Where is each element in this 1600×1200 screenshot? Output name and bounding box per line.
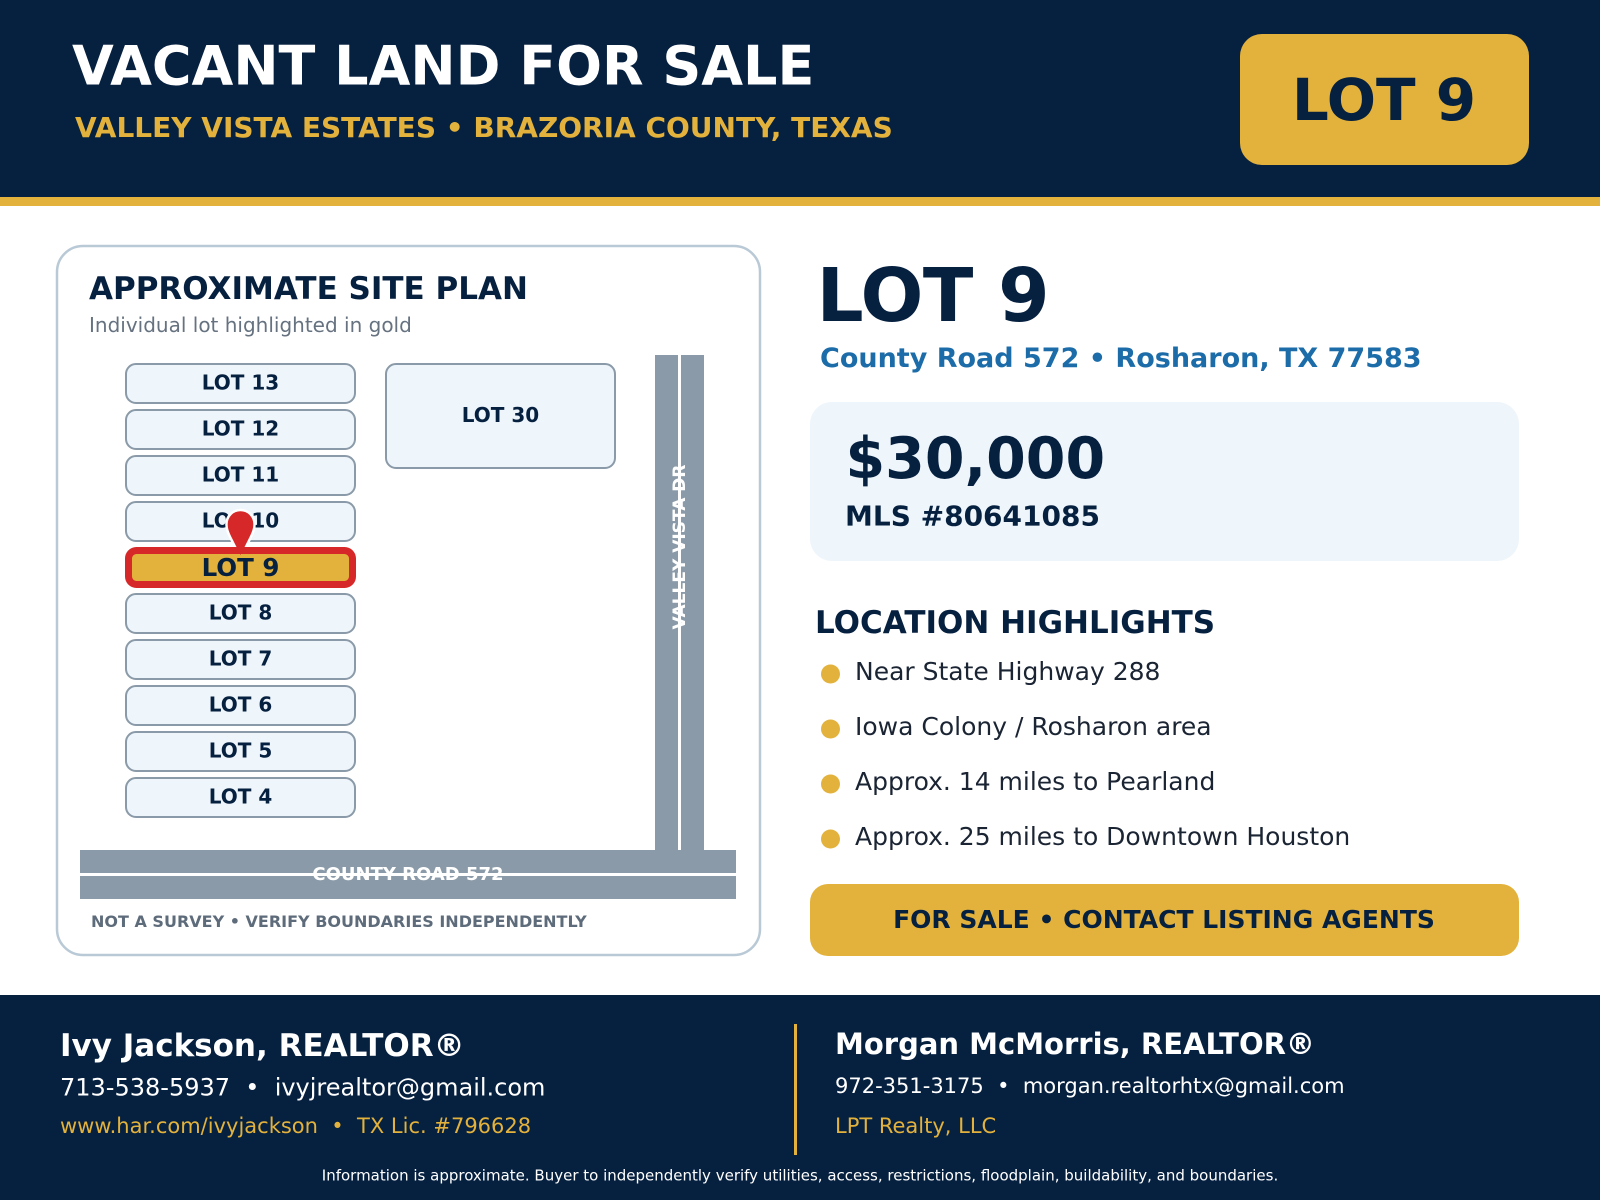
lot 11: LOT 11 (202, 462, 279, 486)
road: Valley Vista Dr: VALLEY VISTA DR (670, 465, 690, 629)
agent: Morgan McMorris: 972-351-3175 • morgan.realtorhtx@gmail.com (835, 1074, 1345, 1098)
lot 12 (126, 410, 355, 449)
legal disclaimer: Information is approximate. Buyer to independently verify utilities, access, restrictions, floodplain, buildability, and boundaries. (322, 1166, 1278, 1184)
lot 7: LOT 7 (209, 646, 272, 670)
lot badge: LOT 9 (1292, 66, 1476, 134)
lot 8: LOT 8 (209, 600, 272, 624)
panel: price (810, 402, 1519, 561)
agent: Morgan McMorris: Morgan McMorris, REALTOR® (835, 1027, 1315, 1061)
lot 30: LOT 30 (462, 403, 539, 427)
road: Valley Vista Dr (655, 355, 704, 850)
lot 13: LOT 13 (202, 370, 279, 394)
agent: Ivy Jackson: Ivy Jackson, REALTOR® (60, 1028, 465, 1064)
lot 5: LOT 5 (209, 738, 272, 762)
road: County Road 572 (80, 850, 736, 899)
road: County Road 572: COUNTY ROAD 572 (312, 864, 504, 885)
lot badge (1240, 34, 1529, 165)
lot 4: LOT 4 (209, 784, 272, 808)
title: VACANT LAND FOR SALE (72, 34, 814, 98)
highlight 3: Approx. 14 miles to Pearland (855, 767, 1215, 796)
lot 6 (126, 686, 355, 725)
location highlights heading: LOCATION HIGHLIGHTS (815, 605, 1215, 641)
lot 11 (126, 456, 355, 495)
lot 12: LOT 12 (202, 416, 279, 440)
lot 8 (126, 594, 355, 633)
site plan subheading: Individual lot highlighted in gold (89, 313, 412, 337)
lot 7 (126, 640, 355, 679)
lot 6: LOT 6 (209, 692, 272, 716)
call to action (810, 884, 1519, 956)
lot 10: LOT 10 (202, 508, 279, 532)
lot 13 (126, 364, 355, 403)
panel: site plan (57, 246, 760, 955)
call to action: FOR SALE • CONTACT LISTING AGENTS (893, 905, 1435, 934)
lot heading: LOT 9 (816, 253, 1049, 339)
site plan heading: APPROXIMATE SITE PLAN (89, 271, 528, 307)
highlight 2: Iowa Colony / Rosharon area (855, 712, 1212, 741)
lot 30 (386, 364, 615, 468)
agent: Ivy Jackson: 713-538-5937 • ivyjrealtor@gmail.com (60, 1074, 545, 1102)
agent: Ivy Jackson: www.har.com/ivyjackson • TX Lic. #796628 (60, 1114, 531, 1138)
lot 4 (126, 778, 355, 817)
highlight 1: Near State Highway 288 (855, 657, 1160, 686)
MLS number: MLS #80641085 (845, 500, 1100, 532)
lot 10 (126, 502, 355, 541)
lot 5 (126, 732, 355, 771)
subtitle: VALLEY VISTA ESTATES • BRAZORIA COUNTY, TEXAS (75, 111, 893, 144)
agent: Morgan McMorris: LPT Realty, LLC (835, 1114, 996, 1138)
lot 9 highlighted: LOT 9 (202, 553, 279, 582)
agent: Morgan McMorris (835, 1027, 1345, 1138)
survey disclaimer: NOT A SURVEY • VERIFY BOUNDARIES INDEPENDENTLY (91, 912, 587, 931)
address: County Road 572 • Rosharon, TX 77583 (820, 343, 1422, 374)
header band (0, 0, 1600, 206)
lot 9 highlighted (128, 550, 352, 584)
icon: map pin (228, 511, 253, 555)
agent: Ivy Jackson (60, 1028, 545, 1138)
price: $30,000 (846, 426, 1105, 492)
footer (0, 995, 1600, 1200)
location highlights list (821, 657, 1350, 851)
highlight 4: Approx. 25 miles to Downtown Houston (855, 822, 1350, 851)
